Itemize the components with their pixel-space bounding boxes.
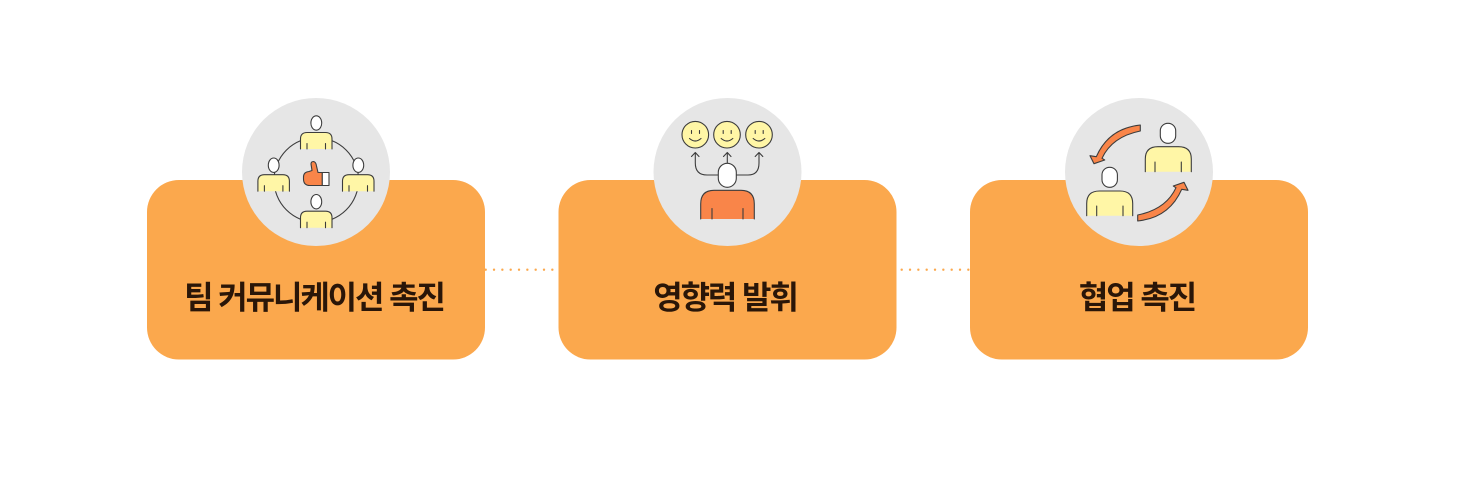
smiley faces — [682, 121, 772, 148]
panel: influence — [558, 98, 896, 360]
heading: influence: 영향력 발휘 — [653, 280, 797, 316]
icon: two people exchanging — [1087, 123, 1191, 221]
panel: team communication — [147, 98, 485, 360]
icon: person influencing smiling faces — [682, 121, 772, 219]
icon: people ring with thumbs up — [258, 116, 374, 228]
person: orange — [701, 163, 754, 219]
person: bottom — [300, 194, 332, 228]
arrow: bottom — [1138, 182, 1188, 221]
heading: team communication: 팀 커뮤니케이션 촉진 — [184, 280, 444, 316]
card background — [147, 180, 485, 360]
icon circle — [1065, 98, 1213, 246]
person: top — [300, 116, 332, 149]
person: lower left — [1087, 167, 1133, 216]
icon circle — [654, 98, 802, 246]
person: upper right — [1145, 123, 1191, 172]
heading: collaboration: 협업 촉진 — [1079, 280, 1195, 316]
card background — [970, 180, 1308, 360]
person: right — [342, 158, 374, 191]
person: left — [258, 158, 289, 191]
arrow: top — [1090, 125, 1140, 164]
panel: collaboration — [970, 98, 1308, 360]
arrows — [692, 152, 763, 175]
icon circle — [242, 98, 390, 246]
icon: thumbs up — [304, 162, 329, 186]
card background — [558, 180, 896, 360]
